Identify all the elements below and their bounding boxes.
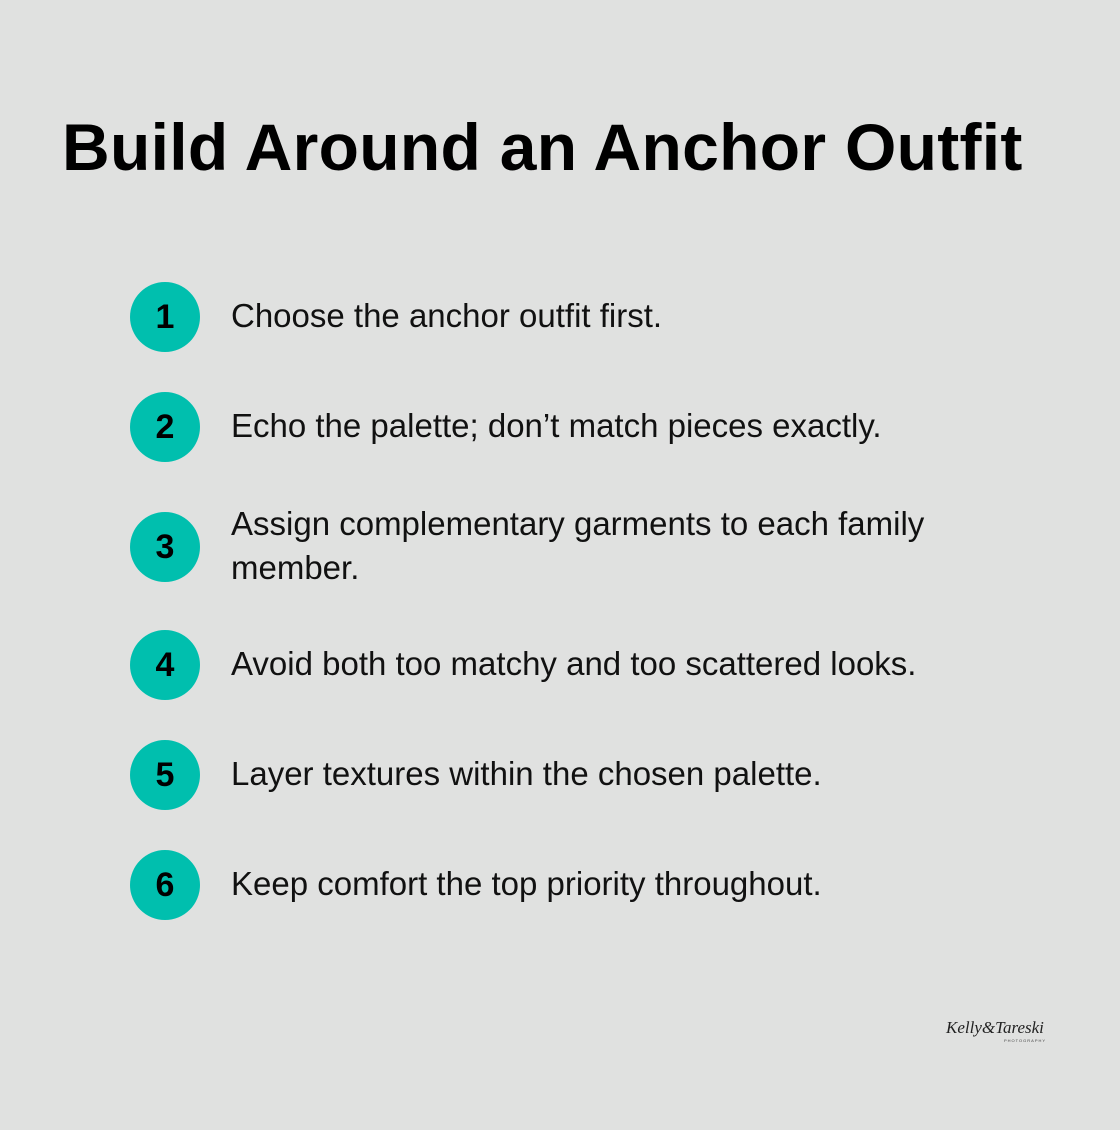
- text 2: Echo the palette; don’t match pieces exactly.: [231, 407, 882, 444]
- badge 2: [130, 392, 200, 462]
- title: Build Around an Anchor Outfit: [62, 110, 1023, 184]
- badge 3: 3: [156, 528, 174, 566]
- logo signature: Kelly&Tareski: [946, 1018, 1044, 1037]
- badge 6: [130, 850, 200, 920]
- text 4: Avoid both too matchy and too scattered looks.: [231, 645, 916, 682]
- step 1: [130, 282, 662, 352]
- text 1: Choose the anchor outfit first.: [231, 297, 662, 334]
- badge 1: 1: [156, 298, 174, 336]
- badge 4: 4: [156, 646, 174, 684]
- text 5: Layer textures within the chosen palette.: [231, 755, 822, 792]
- badge 6: 6: [156, 866, 174, 904]
- step 6: [130, 850, 822, 920]
- text 3: Assign complementary garments to each family member.: [231, 505, 924, 586]
- step 4: [130, 630, 916, 700]
- badge 3: [130, 512, 200, 582]
- step 2: [130, 392, 882, 462]
- badge 1: [130, 282, 200, 352]
- step 5: [130, 740, 822, 810]
- badge 4: [130, 630, 200, 700]
- text 6: Keep comfort the top priority throughout.: [231, 865, 822, 902]
- step 3: [130, 505, 924, 586]
- badge 5: 5: [156, 756, 174, 794]
- badge 2: 2: [156, 408, 174, 446]
- badge 5: [130, 740, 200, 810]
- logo signature: PHOTOGRAPHY: [1004, 1038, 1046, 1043]
